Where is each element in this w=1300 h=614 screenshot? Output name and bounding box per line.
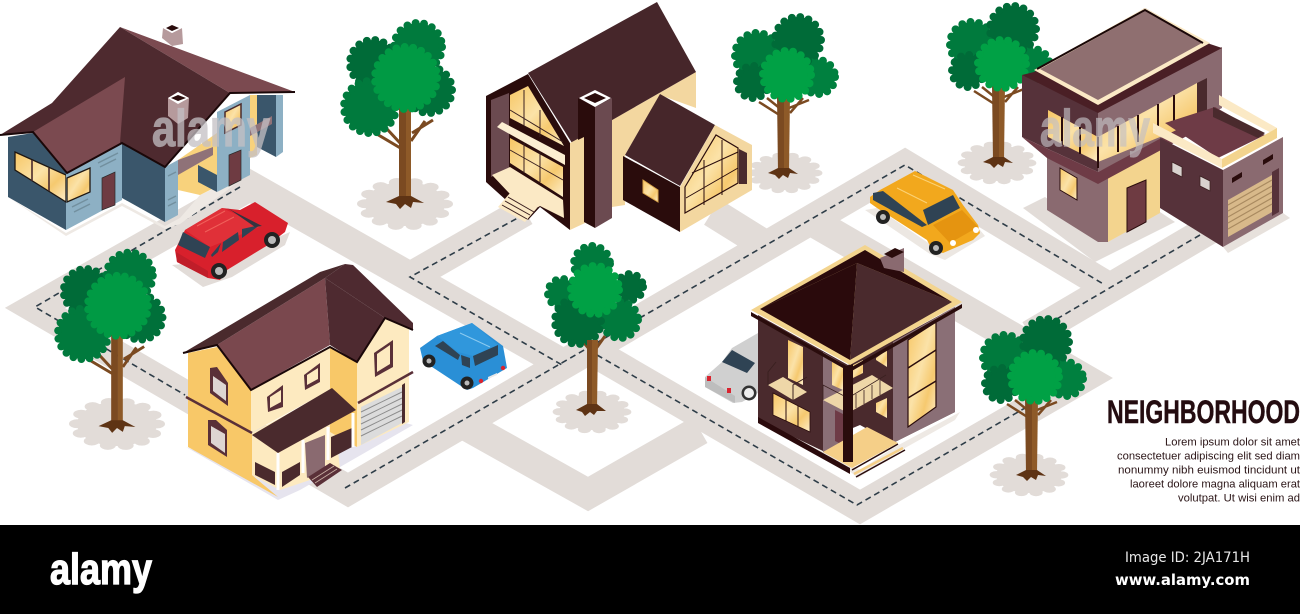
watermark: alamy left: alamy: [152, 100, 270, 158]
route dashed lines: [35, 165, 1200, 505]
car: yellow: [865, 171, 985, 260]
body text: volutpat. Ut wisi enim ad: [1178, 492, 1300, 504]
tree: top right: [950, 6, 1050, 168]
house: yellow two storey: [183, 264, 413, 500]
tree: top centre: [735, 17, 835, 179]
body text: laoreet dolore magna aliquam erat: [1130, 478, 1300, 490]
watermark: alamy right: alamy: [1040, 100, 1150, 158]
body text: consectetuer adipiscing elit sed diam: [1117, 450, 1300, 462]
house: modern flat roof: [1022, 8, 1290, 253]
car: blue: [420, 323, 507, 390]
tree shadows: [77, 145, 1062, 493]
tree: top left: [344, 23, 452, 209]
body text: nonummy nibh euismod tincidunt ut: [1118, 464, 1300, 476]
body text: [1117, 436, 1300, 504]
car: red: [172, 202, 290, 287]
tree: lower left: [58, 252, 163, 433]
tree: lower right: [983, 319, 1083, 481]
house: dark chalet: [486, 2, 752, 232]
footer image id: Image ID: 2JA171H: [1125, 550, 1250, 566]
house: brown pyramid roof: [751, 245, 962, 478]
car: grey: [705, 333, 758, 403]
footer band: [0, 525, 1300, 614]
footer logo: alamy: [50, 545, 152, 594]
body text: Lorem ipsum dolor sit amet: [1165, 436, 1300, 448]
house: blue cottage: [0, 23, 295, 236]
road network: [35, 165, 1210, 507]
footer website: www.alamy.com: [1115, 571, 1250, 589]
tree: centre: [548, 246, 643, 416]
house pad: modern house: [1023, 197, 1175, 262]
